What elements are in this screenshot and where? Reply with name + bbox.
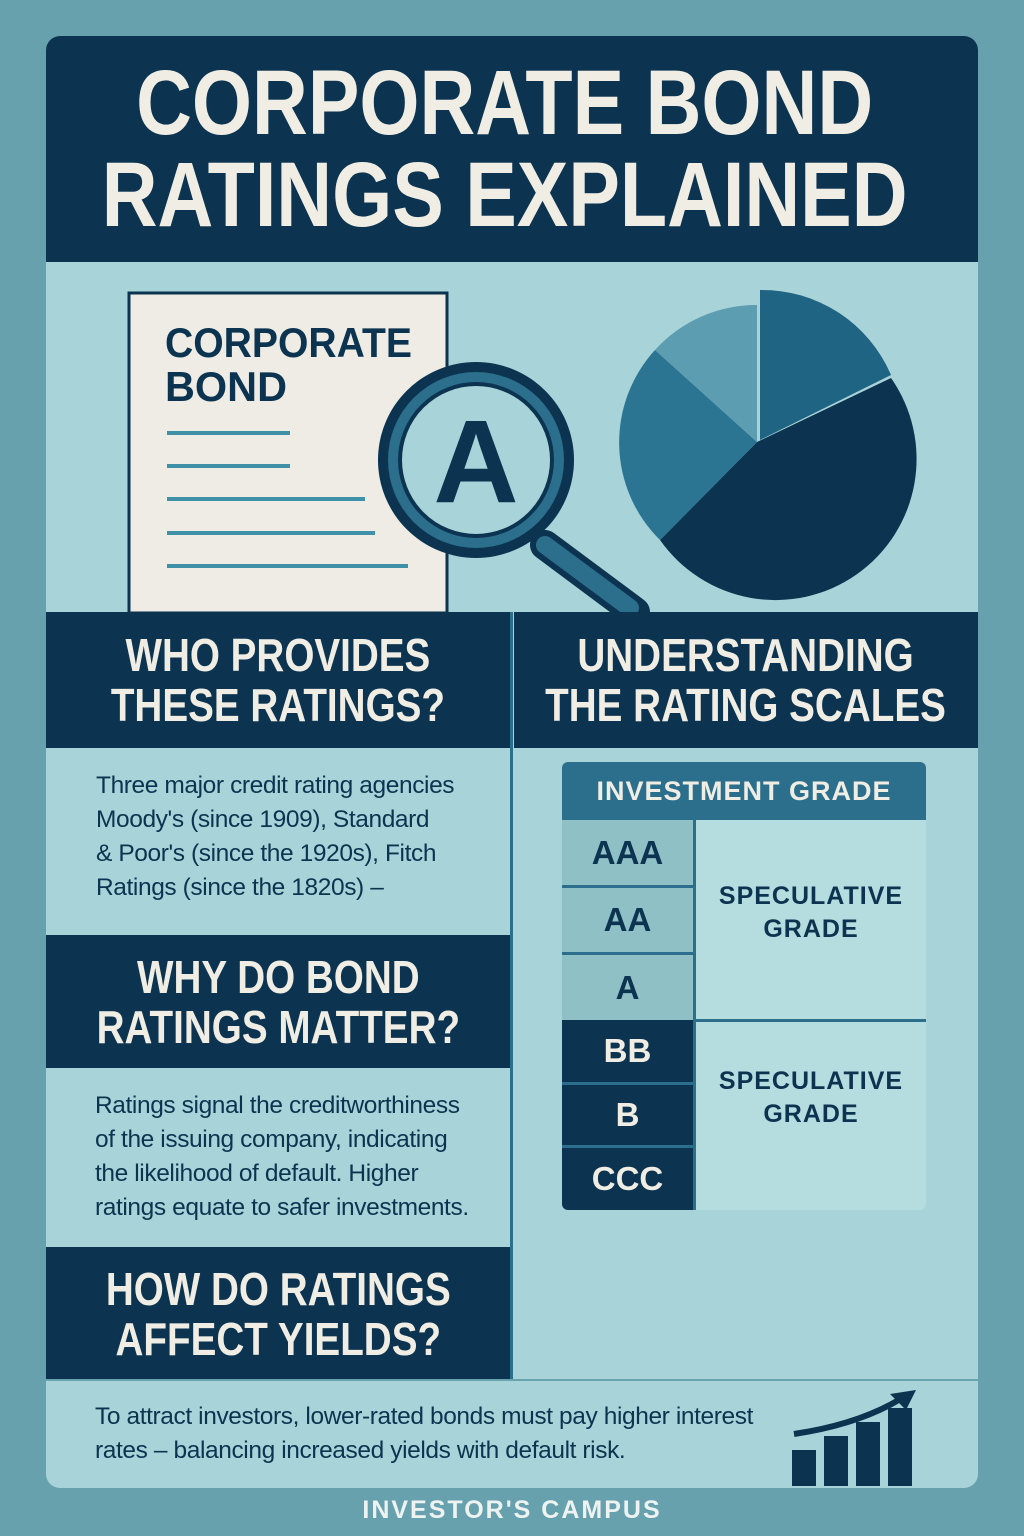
text: agencies: & Poor's (since the 1920s), Fitch (96, 840, 436, 867)
title band (46, 36, 978, 262)
icon: magnifier (378, 362, 635, 612)
heading: rating scales: THE RATING SCALES (546, 679, 946, 731)
heading: yields: AFFECT YIELDS? (115, 1312, 441, 1364)
table header (562, 762, 926, 820)
text: agencies: Ratings (since the 1820s) – (96, 874, 383, 901)
text: why matter: the likelihood of default. Higher (95, 1160, 418, 1187)
speculative cells: B (616, 1096, 639, 1133)
text: why matter: Ratings signal the creditworthiness (95, 1092, 460, 1119)
icon: bond document (129, 293, 447, 613)
heading: who provides (46, 612, 510, 748)
icon: magnifier: A (433, 396, 519, 528)
heading: yields: HOW DO RATINGS (106, 1262, 450, 1314)
label: speculative grade 2: SPECULATIVE (719, 1067, 903, 1095)
label: speculative grade 2 (719, 1067, 903, 1128)
speculative cells: BB (604, 1032, 651, 1069)
label: speculative grade 1: GRADE (763, 915, 859, 943)
label: speculative grade 1 (719, 882, 903, 943)
bottom line (46, 1379, 978, 1381)
heading: yields (46, 1247, 510, 1380)
text: yields (95, 1403, 754, 1464)
illustration (128, 290, 917, 612)
text: why matter (95, 1092, 469, 1221)
divider (510, 612, 513, 1380)
icon: bond document: CORPORATE (165, 319, 412, 366)
investment grade cells: A (616, 968, 639, 1006)
heading: who provides: THESE RATINGS? (111, 679, 445, 731)
text: agencies: Moody's (since 1909), Standard (96, 806, 429, 833)
text: yields: To attract investors, lower-rated bonds must pay higher interest (95, 1403, 753, 1430)
heading: why matter: RATINGS MATTER? (96, 1000, 460, 1052)
text: why matter: ratings equate to safer investments. (95, 1194, 469, 1221)
label: speculative grade 2: GRADE (763, 1100, 859, 1128)
heading: why matter (46, 935, 510, 1068)
text: agencies (96, 772, 454, 901)
speculative cells (562, 1020, 693, 1210)
title band: RATINGS EXPLAINED (102, 144, 908, 246)
icon: growth chart (792, 1390, 916, 1486)
investment grade cells: AAA (592, 834, 663, 870)
label: speculative grade 1: SPECULATIVE (719, 882, 903, 910)
investment grade cells (562, 820, 693, 1020)
heading: rating scales (514, 612, 978, 748)
title band: CORPORATE BOND (136, 52, 874, 154)
speculative cells: CCC (592, 1160, 663, 1197)
heading: rating scales: UNDERSTANDING (578, 629, 914, 681)
heading: why matter: WHY DO BOND (137, 950, 419, 1002)
table header: INVESTMENT GRADE (596, 776, 892, 806)
investment grade cells: AA (604, 901, 651, 938)
text: why matter: of the issuing company, indicating (95, 1126, 447, 1153)
text: yields: rates – balancing increased yields with default risk. (95, 1437, 625, 1464)
pie chart (619, 290, 917, 600)
heading: who provides: WHO PROVIDES (126, 629, 430, 681)
text: agencies: Three major credit rating agencies (96, 772, 454, 799)
rating table (562, 762, 926, 1210)
icon: bond document: BOND (165, 363, 287, 410)
footer: INVESTOR'S CAMPUS (362, 1496, 662, 1524)
